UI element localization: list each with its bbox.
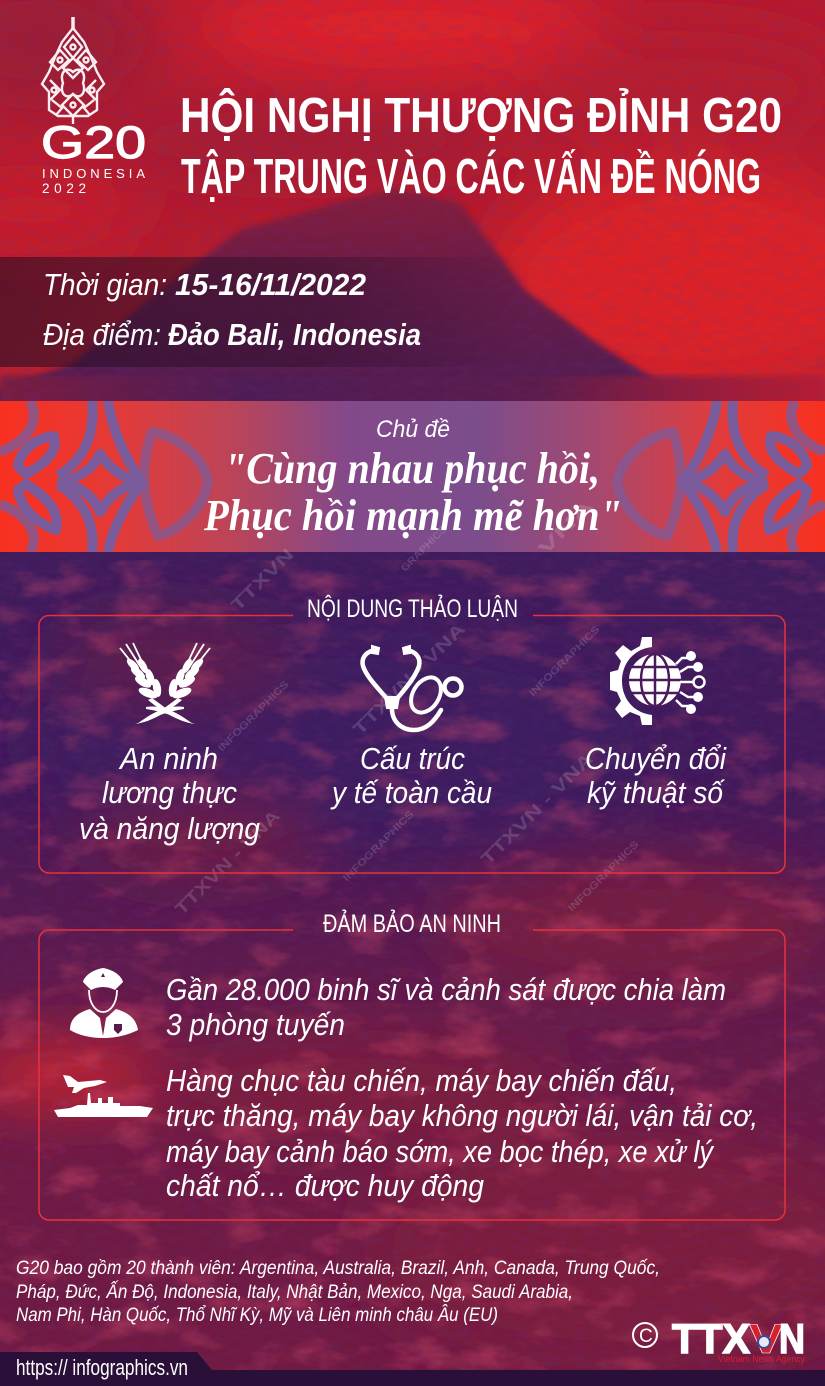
footnote: G20 members: G20 bao gồm 20 thành viên: Argentina, Australia, Brazil, Anh, Canada, Trung Quốc, <box>16 1258 660 1279</box>
text: equipment: chất nổ… được huy động <box>166 1168 484 1203</box>
topic: digital transformation: Chuyển đổi <box>585 741 727 776</box>
text: equipment: Hàng chục tàu chiến, máy bay chiến đấu, <box>166 1063 677 1098</box>
watermarks: TTXVN <box>227 545 297 615</box>
footnote: G20 members <box>16 1258 660 1326</box>
watermarks: INFOGRAPHICS <box>527 624 603 699</box>
topic: food and energy security: và năng lượng <box>79 811 260 846</box>
watermarks: TTXVN - VNA <box>171 806 284 919</box>
footer bar <box>0 1352 825 1386</box>
theme text: Phục hồi mạnh mẽ hơn" <box>203 491 622 540</box>
footnote: G20 members: Pháp, Đức, Ấn Độ, Indonesia, Italy, Nhật Bản, Mexico, Nga, Saudi Arabia, <box>16 1281 573 1303</box>
text: troops <box>166 972 726 1042</box>
text: equipment: trực thăng, máy bay không người lái, vận tải cơ, <box>166 1098 758 1133</box>
theme text: Chủ đề <box>376 416 450 443</box>
volcano <box>0 188 720 420</box>
watermarks: GRAPHICS <box>399 524 450 574</box>
logo: G20 Indonesia 2022: G20 <box>41 117 146 168</box>
watermarks: TTXVN - VNA <box>349 619 469 739</box>
watermarks: TTXVN - VNA <box>477 749 597 869</box>
topic: global health structure: y tế toàn cầu <box>330 775 492 810</box>
event time: 15-16/11/2022 <box>175 267 366 302</box>
event time <box>43 267 366 302</box>
copyright TTXVN logo <box>633 1315 805 1364</box>
theme banner <box>0 401 825 552</box>
text: equipment: máy bay cảnh báo sớm, xe bọc thép, xe xử lý <box>166 1134 715 1169</box>
watermarks: INFOGRAPHICS <box>216 679 292 754</box>
theme text <box>203 416 622 540</box>
copyright TTXVN logo: N <box>779 1315 805 1362</box>
topic: global health structure <box>330 741 492 810</box>
icon: fighter jet and warship <box>54 1075 153 1117</box>
event place: Đảo Bali, Indonesia <box>168 317 421 352</box>
logo: G20 Indonesia 2022 <box>41 17 146 196</box>
topic: digital transformation <box>585 741 727 810</box>
ornament <box>42 17 104 124</box>
topic: food and energy security: An ninh <box>118 741 218 776</box>
copyright TTXVN logo: Vietnam News Agency <box>718 1354 805 1364</box>
info band <box>0 257 530 367</box>
watermarks: INFOGRAPHICS <box>566 839 642 914</box>
copyright TTXVN logo: C <box>639 1326 653 1347</box>
copyright TTXVN logo: TTX <box>672 1315 750 1362</box>
panel frame <box>39 930 785 1220</box>
topic: global health structure: Cấu trúc <box>360 741 465 776</box>
topic: food and energy security: lương thực <box>102 775 237 810</box>
event place <box>43 317 421 352</box>
icon: digital gear globe <box>610 637 704 725</box>
watermarks <box>171 496 642 919</box>
text: troops: 3 phòng tuyến <box>166 1007 345 1042</box>
theme text: "Cùng nhau phục hồi, <box>224 444 600 493</box>
source url: https:// infographics.vn <box>16 1355 188 1380</box>
copyright TTXVN logo: V <box>749 1315 783 1362</box>
panel: discussion topics <box>39 593 785 873</box>
title <box>180 88 782 204</box>
icon: police officer <box>70 968 138 1038</box>
watermarks: VNA <box>534 496 597 559</box>
icon: wheat <box>120 643 210 724</box>
topic: food and energy security <box>79 741 260 846</box>
heading: security: ĐẢM BẢO AN NINH <box>323 908 501 938</box>
text: equipment <box>166 1063 758 1203</box>
panel: security <box>39 908 785 1220</box>
footnote: G20 members: Nam Phi, Hàn Quốc, Thổ Nhĩ Kỳ, Mỹ và Liên minh châu Âu (EU) <box>16 1304 498 1326</box>
event time: Thời gian: <box>43 267 167 302</box>
topic: digital transformation: kỹ thuật số <box>587 775 725 810</box>
heading: discussion: NỘI DUNG THẢO LUẬN <box>307 593 518 623</box>
logo: G20 Indonesia 2022: 2022 <box>42 181 86 196</box>
text: troops: Gần 28.000 binh sĩ và cảnh sát được chia làm <box>166 972 726 1007</box>
logo: G20 Indonesia 2022: INDONESIA <box>42 166 145 181</box>
watermarks: INFOGRAPHICS <box>341 809 417 884</box>
panel frame <box>39 616 785 873</box>
event place: Địa điểm: <box>43 317 161 352</box>
icon: stethoscope <box>363 646 462 730</box>
